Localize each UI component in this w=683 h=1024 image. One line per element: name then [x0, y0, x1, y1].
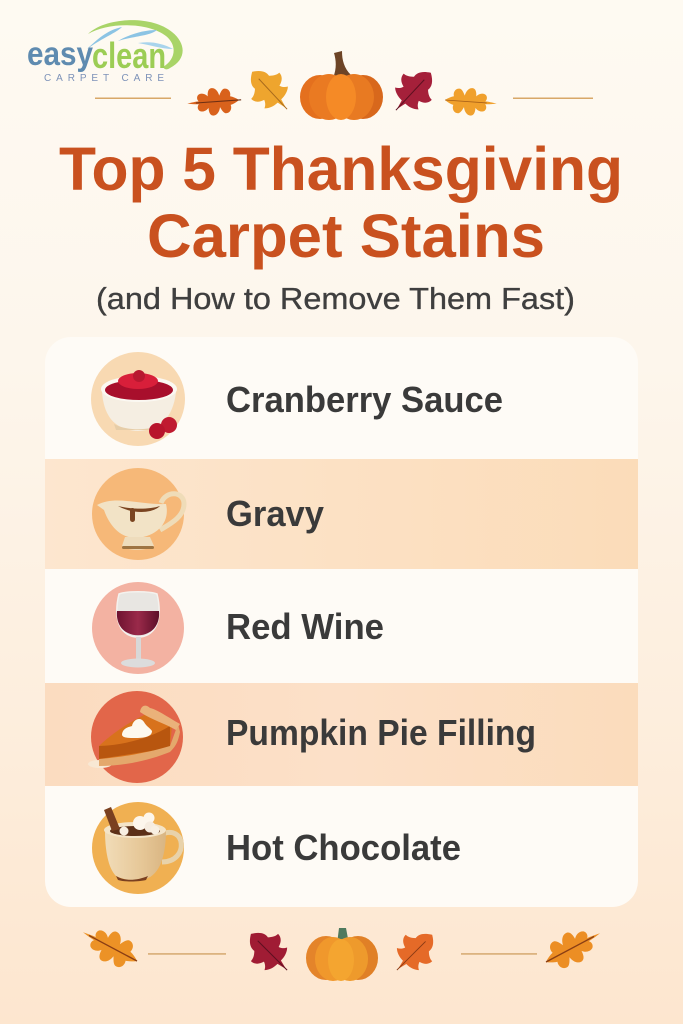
icon: gravy boat	[97, 494, 184, 550]
panel: stain list	[45, 337, 638, 907]
title	[59, 135, 623, 270]
top divider left	[95, 98, 171, 99]
icon: bottom red leaf	[237, 920, 301, 984]
icon: cranberry bowl	[101, 370, 177, 439]
icon: wine glass	[117, 592, 159, 668]
icon: top left oak leaf	[186, 86, 242, 117]
row: gravy	[92, 468, 324, 560]
label: gravy: Gravy	[226, 493, 324, 534]
row: pumpkin pie filling	[88, 691, 536, 783]
logo: Easy Clean Carpet Care	[27, 20, 183, 84]
bottom divider right	[461, 953, 537, 955]
logo: Easy Clean Carpet Care: clean	[92, 35, 166, 76]
row: hot chocolate	[92, 802, 461, 894]
icon: bottom orange leaf	[384, 922, 445, 983]
label: red wine: Red Wine	[226, 606, 384, 647]
icon: top pumpkin	[300, 51, 383, 120]
icon: pie slice	[88, 706, 180, 768]
label: hot chocolate: Hot Chocolate	[226, 827, 461, 868]
title: Carpet Stains	[147, 202, 545, 270]
bottom divider left	[148, 953, 226, 955]
logo: Easy Clean Carpet Care: easy	[27, 35, 94, 72]
icon: top red leaf	[382, 60, 445, 123]
label: cranberry sauce: Cranberry Sauce	[226, 379, 503, 420]
subtitle: (and How to Remove Them Fast)	[96, 281, 575, 316]
row: red wine	[92, 582, 384, 674]
row: cranberry sauce	[91, 352, 503, 446]
icon: cocoa mug	[104, 807, 181, 882]
icon: bottom pumpkin	[306, 928, 378, 981]
icon: bottom right oak leaf	[538, 919, 608, 976]
icon: top golden leaf	[238, 59, 301, 122]
icon: bottom left oak leaf	[75, 918, 145, 975]
icon: top right oak leaf	[444, 86, 498, 117]
label: pumpkin pie filling: Pumpkin Pie Filling	[226, 712, 536, 753]
top divider right	[513, 98, 593, 99]
logo: Easy Clean Carpet Care: CARPET CARE	[44, 73, 164, 84]
title: Top 5 Thanksgiving	[59, 135, 623, 203]
